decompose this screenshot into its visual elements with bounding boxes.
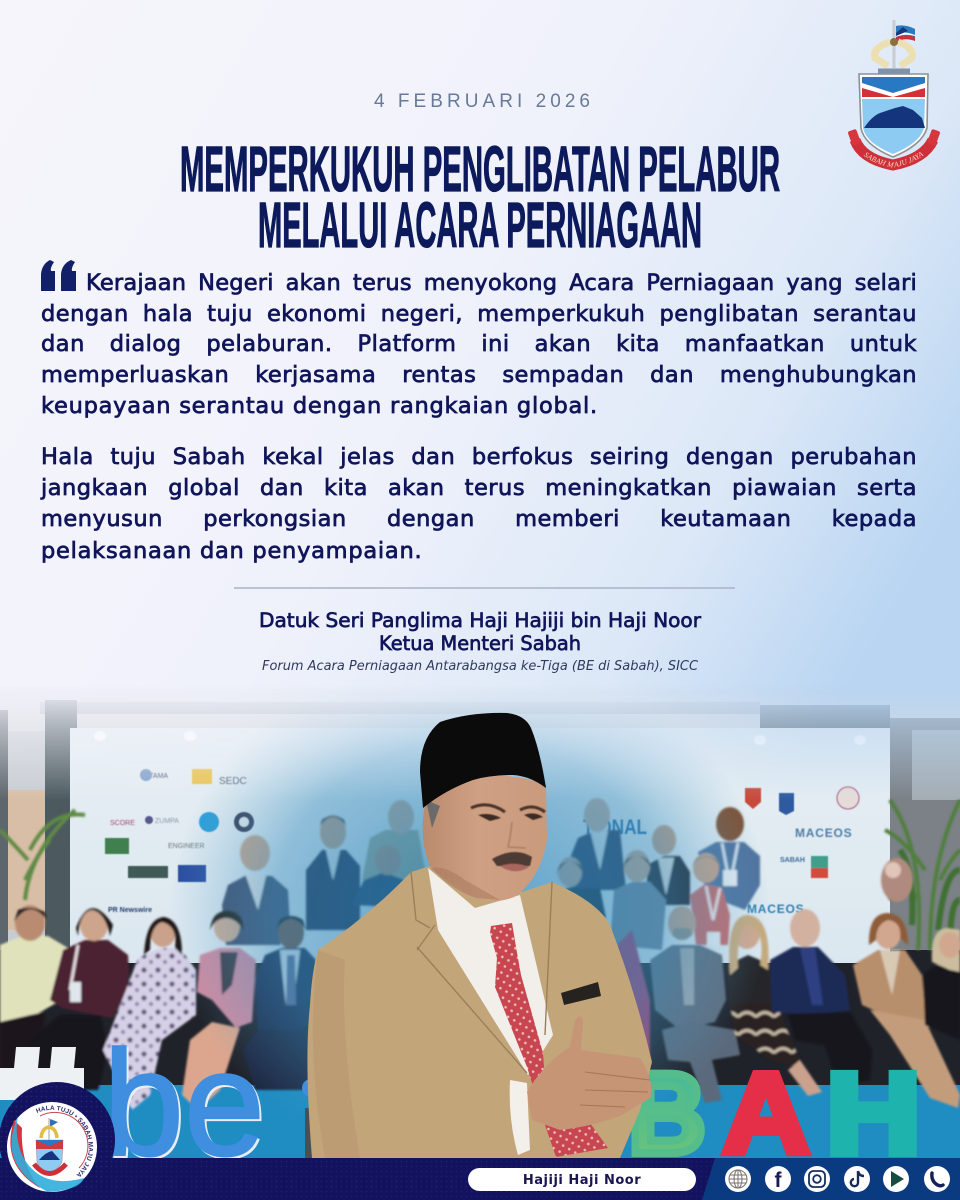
title (180, 133, 780, 261)
body quotation text: dan dialog pelaburan. Platform ini akan kita manfaatkan untuk (41, 331, 917, 357)
people: standing back row (222, 798, 760, 950)
body quotation text: Kerajaan Negeri akan terus menyokong Acara Perniagaan yang selari (86, 270, 917, 296)
body quotation text: memperluaskan kerjasama rentas sempadan dan menghubungkan (41, 362, 917, 388)
lapels (411, 872, 552, 1073)
banner logos and text: JETAMA (141, 773, 168, 780)
paragraph 1 (41, 270, 918, 419)
neck and face (423, 776, 547, 901)
body quotation text: dengan hala tuju ekonomi negeri, memperkukuh penglibatan serantau (41, 301, 917, 327)
small crest (34, 1118, 66, 1174)
body quotation text: pelaksanaan dan penyampaian. (41, 538, 422, 564)
divider (234, 587, 735, 589)
blue glow behind the main figure (183, 709, 758, 1090)
name pill (468, 1168, 696, 1191)
footer bar (0, 1158, 960, 1200)
flag (896, 25, 915, 41)
event letters: #be i SABAH: be (105, 1021, 267, 1189)
banner logos and text (94, 731, 866, 916)
date: 4 FEBRUARI 2026 (374, 91, 590, 112)
tie (490, 923, 608, 1157)
paragraph 2 (40, 444, 917, 564)
banner logos and text: SCORE (110, 820, 135, 827)
name tag (561, 982, 601, 1005)
body quotation text: menyusun perkongsian dengan memberi keutamaan kepada (41, 506, 917, 532)
arms (875, 42, 912, 66)
people: seated front row (0, 905, 960, 1110)
attribution (259, 609, 702, 674)
banner logos and text: ZUMPA (155, 818, 179, 825)
flowers (881, 858, 913, 902)
event letters: #be i SABAH: H (826, 1050, 921, 1178)
Sabah crest (848, 20, 940, 171)
icon: phone (924, 1166, 950, 1192)
footer bar: Hajiji Haji Noor (523, 1173, 641, 1188)
icon: facebook (765, 1166, 791, 1192)
body quotation text (40, 270, 918, 564)
scroll (855, 140, 933, 165)
facial features (471, 805, 545, 871)
quotation mark (41, 260, 76, 291)
jacket (307, 866, 652, 1158)
body quotation text: jangkaan global dan kita akan terus meningkatkan piawaian serta (41, 475, 917, 501)
body quotation text: keupayaan serantau dengan rangkaian global. (41, 393, 598, 419)
icon: facebook: f (774, 1169, 782, 1192)
event letters: #be i SABAH: be (103, 1019, 265, 1187)
badge: Hala Tuju Sabah Maju Jaya: HALA TUJU • SABAH MAJU JAYA (36, 1106, 94, 1177)
shield (859, 74, 928, 157)
main figure: Chief Minister (307, 713, 652, 1158)
banner logos and text: PR Newswire (108, 907, 152, 914)
icon: web (725, 1166, 751, 1192)
social icons (725, 1166, 950, 1192)
body quotation text: Hala tuju Sabah kekal jelas dan berfokus seiring dengan perubahan (41, 444, 917, 470)
icon: play (883, 1166, 909, 1192)
banner logos and text: MACEOS (795, 826, 852, 840)
wreath (878, 68, 910, 74)
badge: Hala Tuju Sabah Maju Jaya (0, 1082, 115, 1192)
event letters: #be i SABAH (0, 1045, 917, 1158)
banner logos and text: SEDC (219, 776, 247, 787)
event letters: #be i SABAH: B (628, 1050, 706, 1178)
speaker name: Datuk Seri Panglima Haji Hajiji bin Haji Noor (259, 609, 702, 632)
banner logos and text: TIONAL (583, 816, 647, 839)
hand (527, 1016, 651, 1130)
songkok (420, 713, 546, 808)
Sabah crest: SABAH MAJU JAYA (864, 152, 924, 168)
icon: instagram (804, 1166, 830, 1192)
event letters: #be i SABAH: A (722, 1050, 810, 1178)
sleeve and cuff (510, 1080, 530, 1155)
shirt (428, 868, 553, 1075)
event line: Forum Acara Perniagaan Antarabangsa ke-Tiga (BE di Sabah), SICC (262, 659, 699, 674)
icon: tiktok (844, 1166, 870, 1192)
speaker position: Ketua Menteri Sabah (379, 632, 581, 655)
photo: group at the business event (0, 700, 960, 1158)
plants (0, 800, 960, 950)
banner logos and text: SABAH (780, 857, 805, 864)
banner logos and text: ENGINEER (168, 843, 205, 850)
banner logos and text: MACEOS (747, 902, 804, 916)
